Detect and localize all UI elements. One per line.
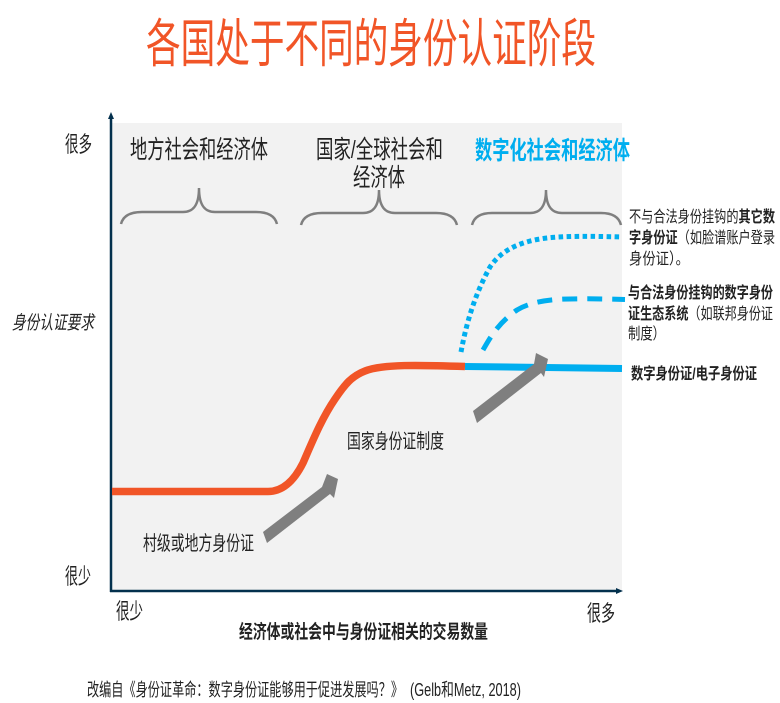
callout: federated identity ecosystem: 制度） xyxy=(628,325,665,343)
x axis label: many: 很多 xyxy=(587,601,615,626)
brace: local xyxy=(121,188,277,224)
heading: local economy: 地方社会和经济体 xyxy=(130,136,268,164)
heading: national and global economy: 经济体 xyxy=(353,164,405,192)
callout: other digital identity: 身份证）。 xyxy=(629,250,689,268)
panel: chart background xyxy=(112,123,622,591)
curve: other digital identity (dotted) xyxy=(461,236,622,352)
brace: digital xyxy=(472,190,621,225)
line: digital identity xyxy=(465,366,622,368)
curve: federated identity ecosystem (dashed) xyxy=(483,299,625,350)
source note: (Gelb和Metz, 2018) xyxy=(410,680,521,700)
label: national identity: 国家身份证制度 xyxy=(347,430,444,453)
callout: other digital identity xyxy=(629,207,775,268)
callout: federated identity ecosystem xyxy=(628,283,773,343)
y axis label: many: 很多 xyxy=(65,132,92,157)
heading: national and global economy: 国家/全球社会和 xyxy=(316,136,443,164)
curve: national identity trend xyxy=(112,365,465,492)
heading: national and global economy xyxy=(316,136,443,192)
x axis label: few: 很少 xyxy=(116,599,143,624)
arrow: upper xyxy=(473,353,548,423)
y axis title: 身份认证要求 xyxy=(12,312,96,334)
x axis title: 经济体或社会中与身份证相关的交易数量 xyxy=(239,620,488,643)
arrow: lower xyxy=(263,474,338,543)
heading: digital economy: 数字化社会和经济体 xyxy=(475,137,630,165)
axes xyxy=(108,112,623,594)
label: village identity: 村级或地方身份证 xyxy=(143,532,254,555)
source note: 改编自《身份证革命：数字身份证能够用于促进发展吗？》 xyxy=(87,680,403,700)
y axis label: few: 很少 xyxy=(65,564,91,589)
brace: national xyxy=(301,190,457,225)
